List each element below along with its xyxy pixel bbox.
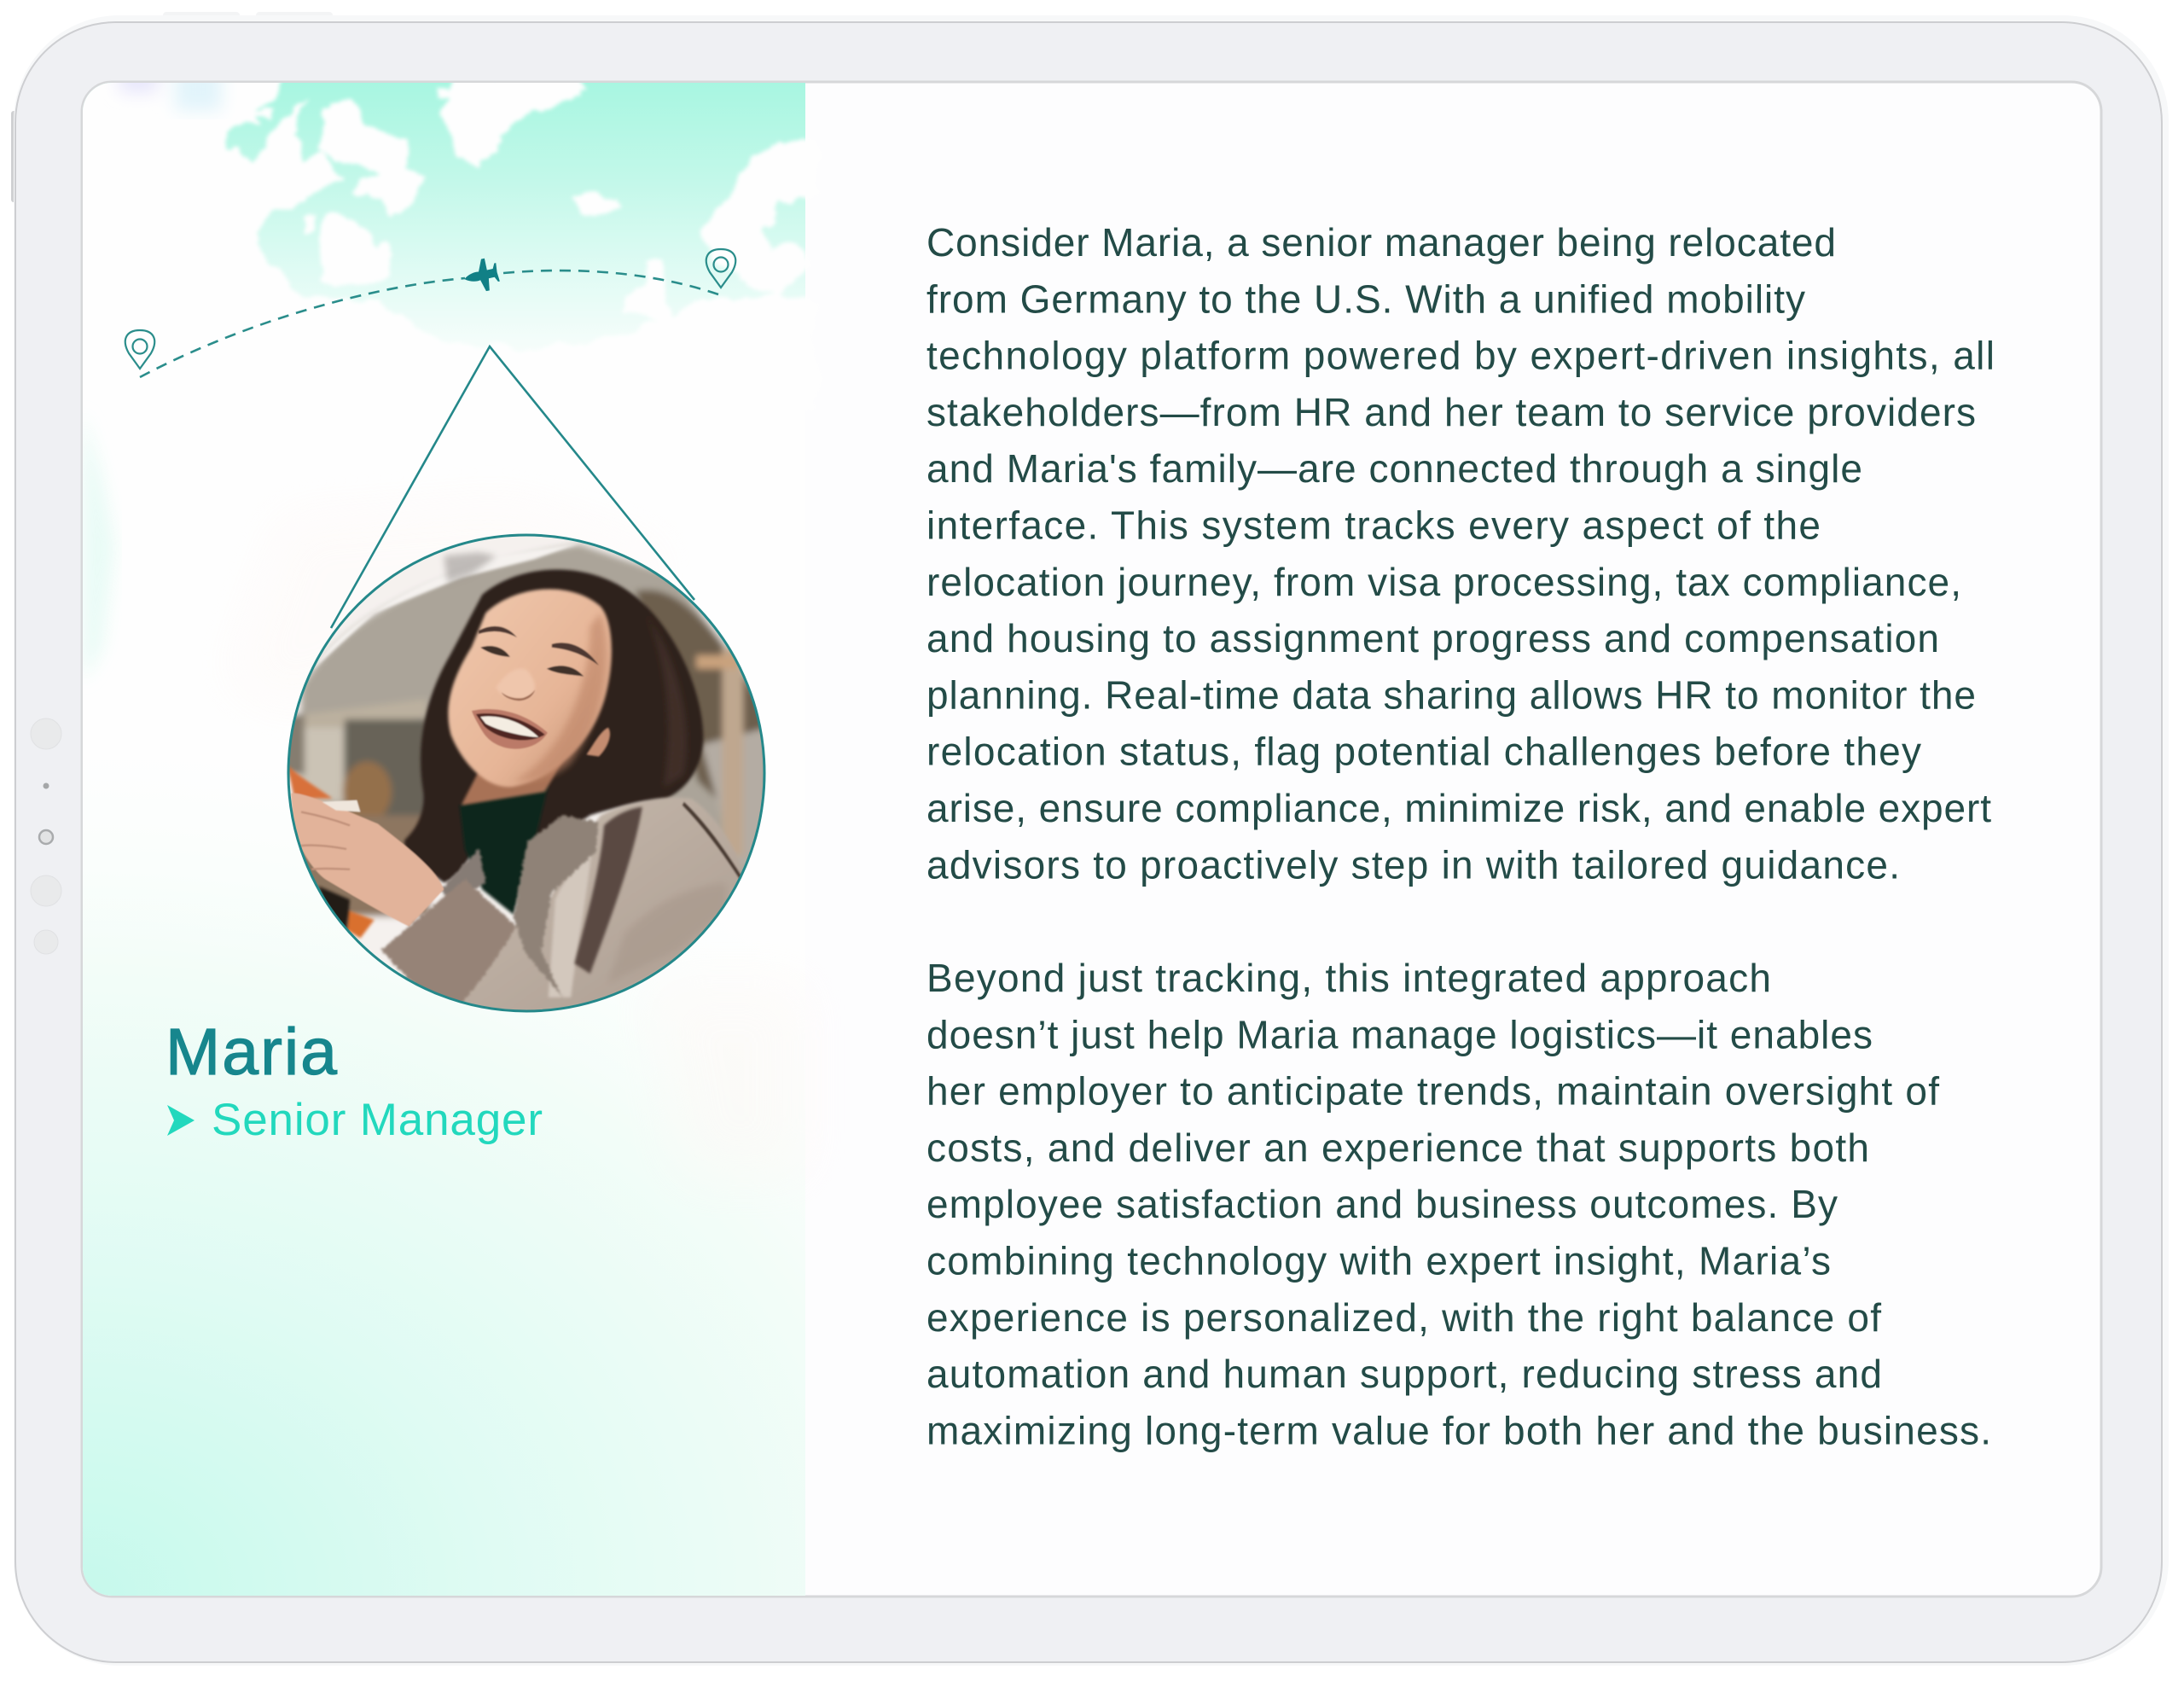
sleeve cuff	[381, 880, 517, 1004]
name: Maria: Maria	[166, 1015, 337, 1089]
paragraph one: relocation status, flag potential challenges before they	[926, 730, 1921, 774]
fur collar	[514, 816, 599, 998]
faint pink land	[222, 495, 665, 717]
paragraph one: arise, ensure compliance, minimize risk, and enable expert	[926, 786, 1991, 830]
world map silhouettes	[83, 83, 805, 355]
paragraph two: employee satisfaction and business outcomes. By	[926, 1182, 1838, 1226]
panel: left profile with world map	[76, 68, 816, 1596]
paragraph one: stakeholders—from HR and her team to service providers	[926, 390, 1976, 434]
pale green land left edge	[83, 440, 116, 666]
icon: airplane	[461, 256, 502, 295]
coat	[430, 798, 741, 1017]
smile	[472, 709, 548, 749]
icon: destination map pin	[706, 249, 735, 288]
face	[448, 589, 612, 787]
paragraph two	[926, 956, 1991, 1452]
portrait photo of Maria	[256, 512, 802, 1040]
paragraph two: combining technology with expert insight, Maria’s	[926, 1239, 1831, 1283]
eyes	[480, 646, 510, 657]
paragraph one: technology platform powered by expert-driven insights, all	[926, 334, 1995, 378]
hair behind	[404, 569, 703, 882]
paragraph two: doesn’t just help Maria manage logistics—it enables	[926, 1012, 1873, 1056]
neck	[462, 761, 562, 806]
eyebrows	[479, 626, 517, 637]
paragraph one: Consider Maria, a senior manager being relocated	[926, 220, 1836, 265]
side sensors: front camera and dots	[31, 718, 61, 954]
paragraph one: from Germany to the U.S. With a unified mobility	[926, 276, 1805, 321]
paragraph one: planning. Real-time data sharing allows HR to monitor the	[926, 672, 1976, 717]
paragraph one: and housing to assignment progress and compensation	[926, 616, 1939, 660]
flight route dashed line second leg	[503, 270, 721, 295]
icon: origin map pin	[125, 330, 154, 369]
paragraph two: costs, and deliver an experience that supports both	[926, 1126, 1869, 1170]
hair strand over coat	[574, 807, 642, 974]
ear	[587, 728, 610, 756]
paragraph two: experience is personalized, with the right balance of	[926, 1295, 1881, 1340]
teardrop outline	[331, 346, 694, 628]
paragraph one: advisors to proactively step in with tailored guidance.	[926, 842, 1900, 887]
nose	[497, 669, 535, 699]
hand	[291, 793, 444, 927]
paragraph one: and Maria's family—are connected through a single	[926, 446, 1862, 491]
role: Senior Manager: Senior Manager	[212, 1095, 543, 1145]
paragraph two: automation and human support, reducing stress and	[926, 1352, 1882, 1396]
portrait ring	[288, 535, 764, 1011]
paragraph two: Beyond just tracking, this integrated approach	[926, 956, 1771, 1000]
paragraph one	[926, 220, 1995, 887]
paragraph one: relocation journey, from visa processing, tax compliance,	[926, 560, 1961, 604]
paragraph two: her employer to anticipate trends, maintain oversight of	[926, 1069, 1939, 1114]
flight route dashed line	[140, 278, 465, 377]
turtleneck	[460, 785, 549, 915]
lavender and pale blue tint top-left	[118, 83, 227, 116]
paragraph one: interface. This system tracks every aspect of the	[926, 503, 1821, 548]
photo background	[256, 512, 802, 1040]
paragraph two: maximizing long-term value for both her and the business.	[926, 1408, 1991, 1452]
icon: teal arrow	[167, 1105, 195, 1136]
faint pink lower right	[648, 981, 805, 1178]
